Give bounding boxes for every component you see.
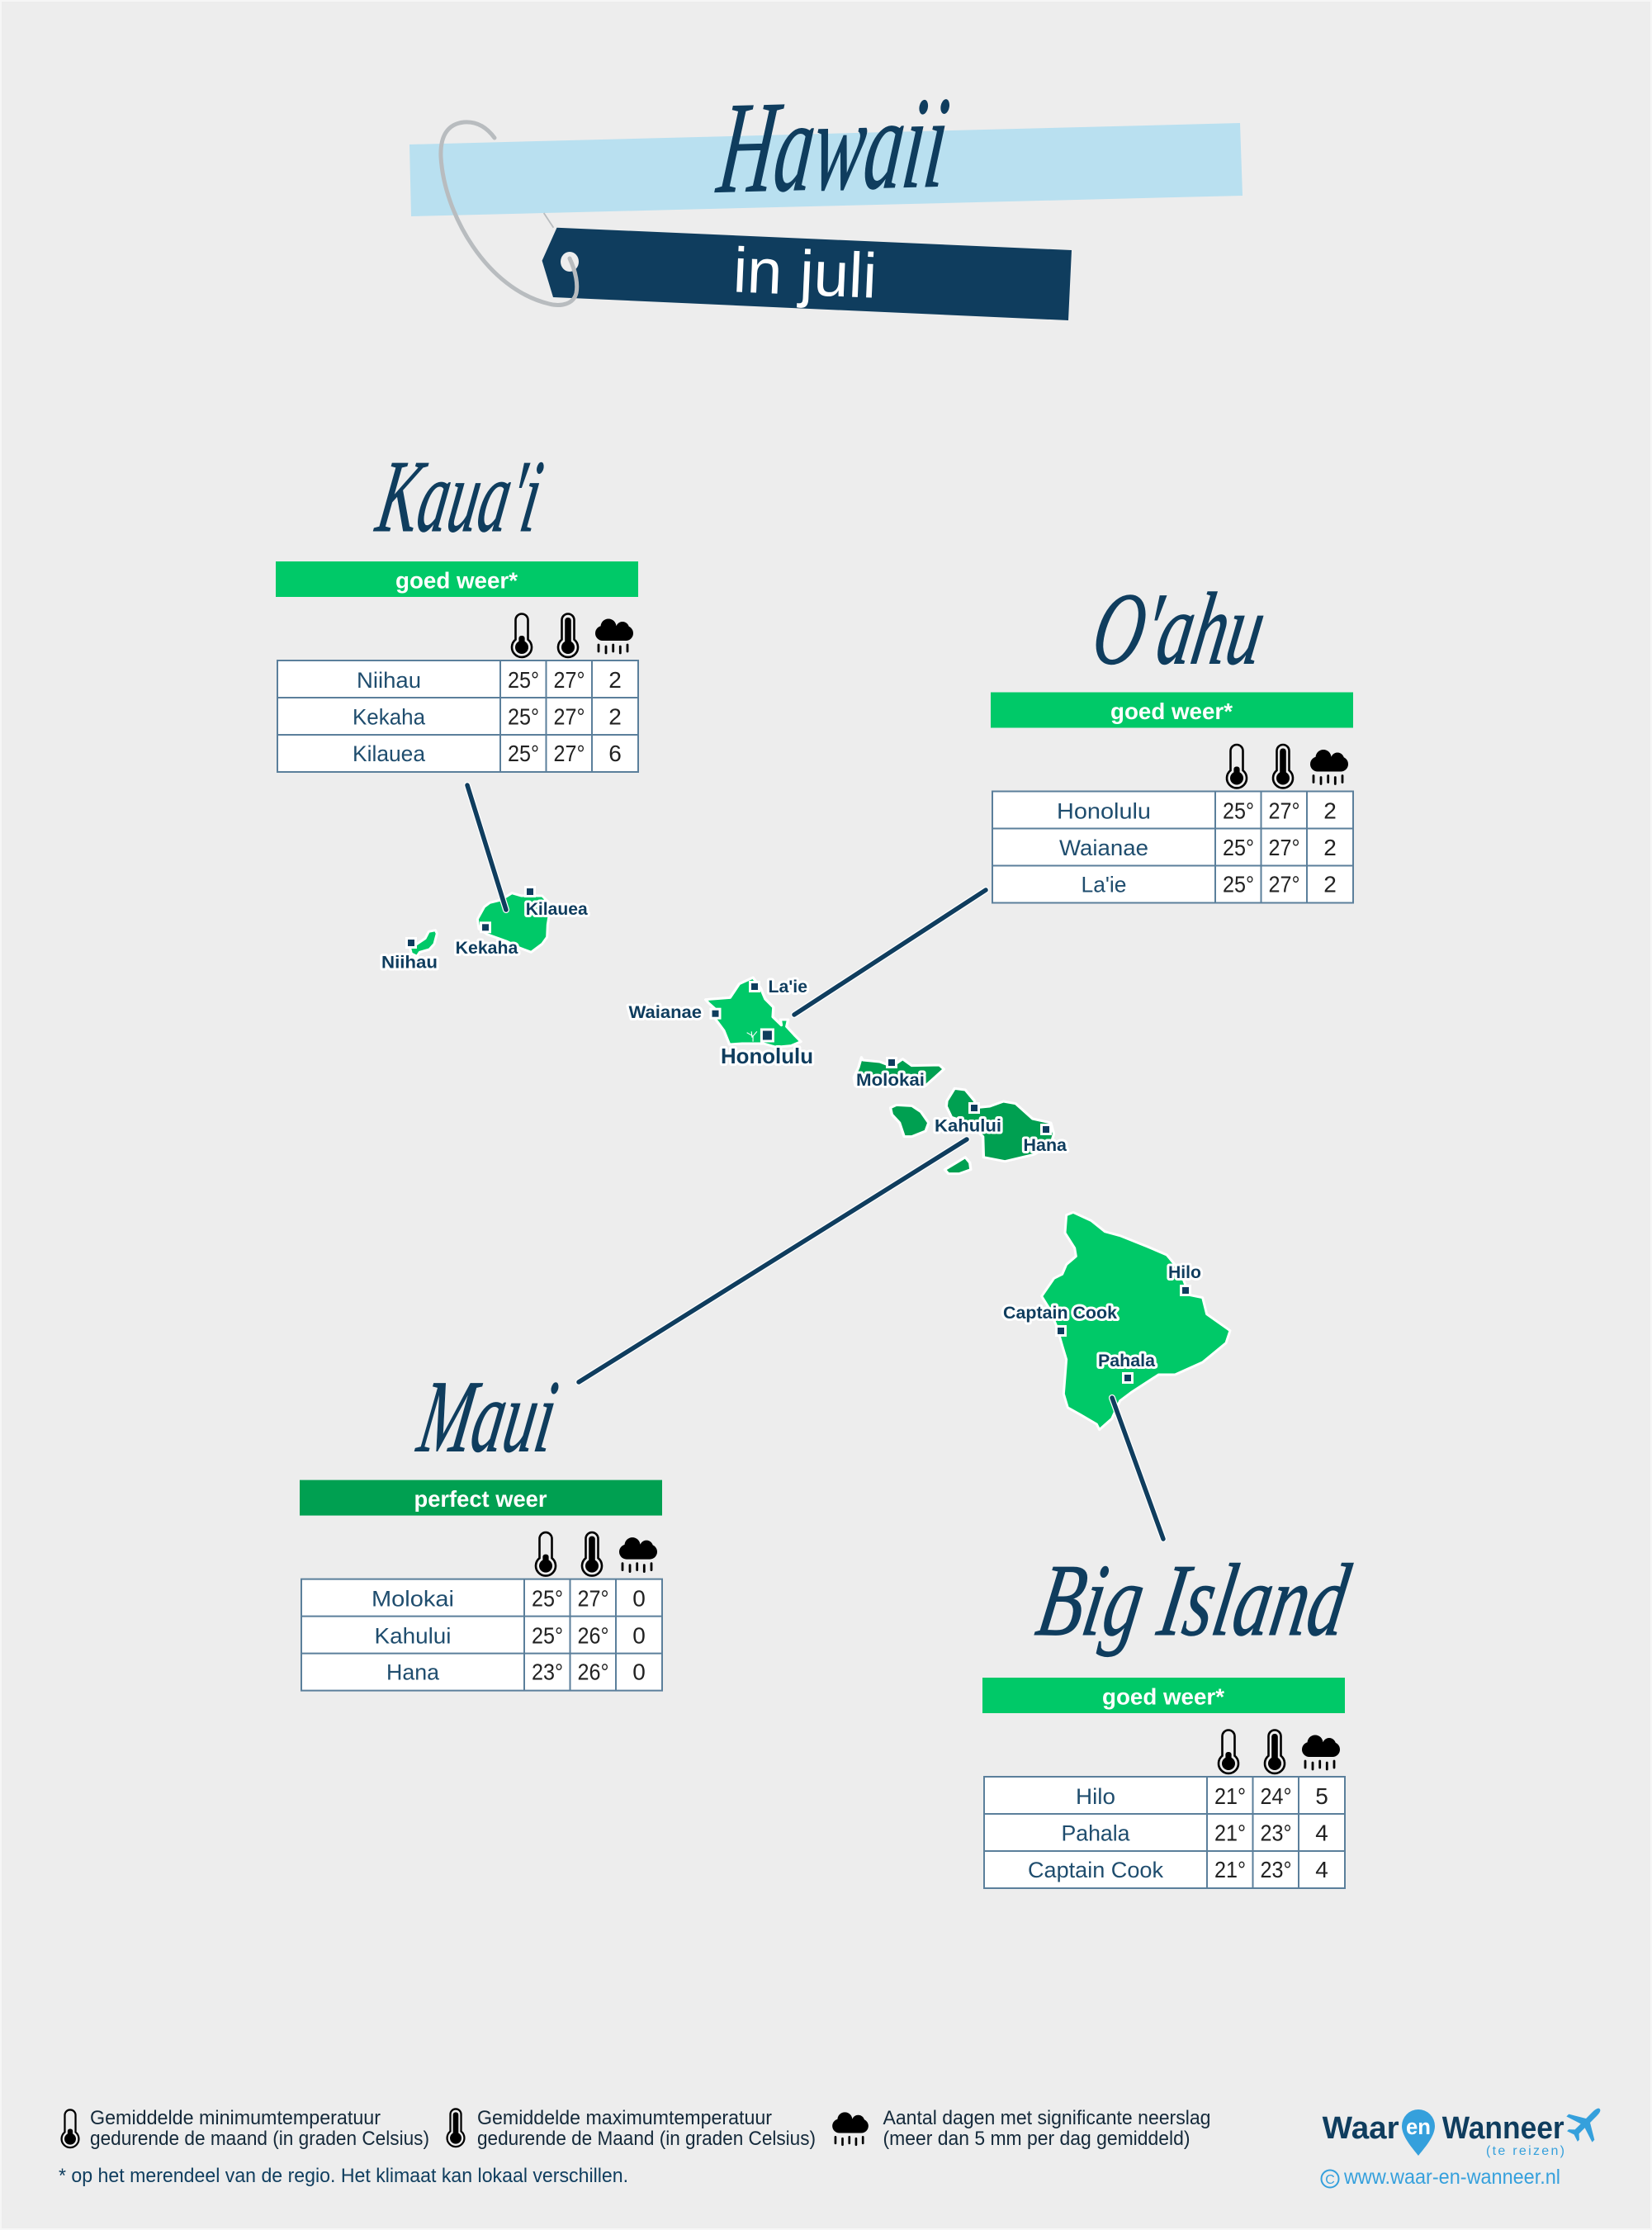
icon: rain	[595, 619, 633, 653]
legend: minimum temperature: Gemiddelde minimumtemperatuur	[90, 2107, 381, 2129]
weather table: 6	[608, 741, 622, 766]
place: Captain Cook	[1003, 1304, 1117, 1336]
island: Oahu	[706, 978, 801, 1047]
legend: rain days	[832, 2107, 1210, 2150]
weather table: 25°	[1223, 835, 1254, 860]
place: Pahala	[1098, 1352, 1155, 1382]
heading: Big Island: Big Island	[1030, 1544, 1357, 1658]
weather table: Pahala	[1062, 1821, 1130, 1846]
legend: maximum temperature: gedurende de Maand (in graden Celsius)	[477, 2128, 816, 2150]
icon: maximum temperature	[1273, 745, 1293, 788]
map markers and place names	[381, 887, 1201, 1382]
weather table	[984, 1777, 1345, 1888]
weather table: 27°	[553, 667, 585, 693]
weather rating bar: goed weer*	[395, 568, 518, 593]
weather table: 2	[1323, 798, 1337, 824]
place: Kekaha: Kekaha	[456, 939, 518, 958]
icon: maximum temperature	[558, 614, 578, 657]
place: Pahala: Pahala	[1098, 1352, 1155, 1371]
weather rating bar	[991, 692, 1353, 728]
subtitle: in juli: in juli	[731, 234, 878, 312]
weather table: Honolulu	[1057, 799, 1151, 824]
place: Honolulu	[721, 1030, 813, 1068]
weather table: Kahului	[375, 1623, 451, 1648]
place: Hilo	[1168, 1263, 1201, 1295]
tag ring	[441, 122, 577, 305]
island: Big Island	[1042, 1212, 1230, 1430]
weather table: Hilo	[1076, 1784, 1115, 1809]
weather table: 25°	[1223, 872, 1254, 897]
legend: minimum temperature: gedurende de maand (in graden Celsius)	[90, 2128, 429, 2150]
heading: O'ahu: O'ahu	[1085, 572, 1273, 686]
title: Hawaii: Hawaii	[711, 71, 955, 221]
copyright and website: www.waar-en-wanneer.nl	[1343, 2166, 1560, 2189]
place: Kekaha	[456, 923, 518, 958]
weather table: 25°	[508, 704, 539, 730]
weather table: 21°	[1214, 1857, 1246, 1882]
weather table: 25°	[508, 741, 539, 766]
heading: Maui: Maui	[410, 1360, 565, 1474]
connector: Kauai	[467, 785, 506, 910]
weather table: 2	[1323, 872, 1337, 897]
weather table: 24°	[1260, 1783, 1291, 1809]
place: La'ie	[750, 978, 807, 997]
icon: maximum temperature	[582, 1532, 602, 1576]
place: Captain Cook: Captain Cook	[1003, 1304, 1117, 1323]
weather table	[301, 1579, 662, 1691]
icon: minimum temperature	[1219, 1730, 1238, 1773]
place: Kahului	[935, 1103, 1001, 1136]
heading: Kaua'i: Kaua'i	[369, 440, 550, 554]
icon: rain	[1310, 750, 1348, 784]
island: Kahoolawe	[944, 1158, 971, 1174]
tag hole	[561, 252, 579, 272]
legend: maximum temperature: Gemiddelde maximumtemperatuur	[477, 2107, 772, 2129]
place: Molokai	[856, 1058, 925, 1090]
place: Kilauea: Kilauea	[526, 900, 588, 919]
place: Hana: Hana	[1024, 1136, 1067, 1155]
title band	[409, 123, 1243, 216]
icon: minimum temperature	[536, 1532, 556, 1576]
weather rating bar: perfect weer	[414, 1486, 547, 1512]
panel: Big Island	[982, 1544, 1357, 1888]
weather table: 21°	[1214, 1820, 1246, 1846]
weather table: 27°	[553, 741, 585, 766]
weather table: La'ie	[1082, 872, 1126, 897]
weather table: 21°	[1214, 1783, 1246, 1809]
weather table: Niihau	[357, 668, 421, 693]
connector: Big Island	[1112, 1398, 1163, 1539]
icon: rain	[1302, 1735, 1340, 1769]
weather table: 27°	[553, 704, 585, 730]
place: Kahului: Kahului	[935, 1117, 1001, 1136]
weather table: 27°	[1268, 872, 1299, 897]
weather table	[992, 791, 1353, 903]
weather table: Captain Cook	[1028, 1858, 1163, 1882]
weather table: 27°	[578, 1586, 609, 1612]
weather table: 25°	[532, 1622, 563, 1648]
weather rating bar: goed weer*	[1102, 1684, 1224, 1709]
weather table: 26°	[578, 1659, 609, 1685]
map: Hawaiian islands	[410, 893, 1230, 1430]
weather table: Kilauea	[353, 741, 426, 766]
legend: rain days: Aantal dagen met significante neerslag	[883, 2107, 1210, 2129]
island: Kauai	[477, 893, 550, 952]
island: Niihau	[410, 930, 437, 956]
icon: rain	[619, 1537, 657, 1572]
copyright and website: C	[1325, 2173, 1335, 2187]
weather table: 4	[1315, 1820, 1328, 1846]
weather table: 26°	[578, 1622, 609, 1648]
island: Maui	[946, 1088, 1053, 1162]
icon: maximum temperature	[1265, 1730, 1285, 1773]
connector: Oahu	[794, 890, 986, 1015]
place: Molokai: Molokai	[856, 1071, 925, 1090]
weather table: 0	[632, 1659, 646, 1685]
weather table	[277, 660, 638, 772]
weather rating bar	[982, 1678, 1345, 1713]
weather table: 5	[1315, 1783, 1328, 1809]
weather table: Kekaha	[353, 705, 426, 730]
weather table: 2	[608, 667, 622, 693]
weather table: 27°	[1268, 798, 1299, 824]
panel: Oahu	[991, 572, 1353, 903]
connector: Maui	[579, 1139, 967, 1382]
weather table: 23°	[532, 1659, 563, 1685]
weather table: 2	[608, 704, 622, 730]
icon: minimum temperature	[1227, 745, 1247, 788]
place: Honolulu: Honolulu	[721, 1044, 813, 1068]
panel: Kauai	[276, 440, 638, 772]
logo wordmark right: Wanneer	[1442, 2111, 1564, 2146]
place: Waianae: Waianae	[629, 1003, 702, 1022]
legend	[59, 2107, 1210, 2187]
footnote: * op het merendeel van de regio. Het klimaat kan lokaal verschillen.	[59, 2165, 628, 2187]
title block: Hawaii in juli	[409, 71, 1243, 320]
logo: Waar en Wanneer	[1321, 2096, 1612, 2189]
weather table: 0	[632, 1622, 646, 1648]
island: Lanai	[891, 1105, 929, 1137]
place: La'ie: La'ie	[768, 978, 807, 997]
place: Kilauea	[525, 887, 588, 919]
logo tagline: (te reizen)	[1486, 2144, 1564, 2158]
weather table: 25°	[1223, 798, 1254, 824]
luggage tag	[542, 228, 1072, 320]
weather table: 27°	[1268, 835, 1299, 860]
place: Hana	[1024, 1124, 1067, 1155]
weather rating bar	[276, 561, 638, 597]
weather table: Waianae	[1059, 836, 1148, 860]
weather table: Hana	[386, 1660, 440, 1685]
logo pin: en	[1406, 2114, 1431, 2139]
icon: airplane	[1560, 2096, 1612, 2149]
island: Molokai	[854, 1058, 944, 1086]
logo wordmark left: Waar	[1323, 2111, 1399, 2146]
weather rating bar	[300, 1480, 662, 1516]
weather rating bar: goed weer*	[1110, 698, 1233, 724]
tag string	[544, 213, 553, 228]
place: Niihau	[381, 938, 438, 973]
weather table: 25°	[532, 1586, 563, 1612]
weather table: 23°	[1260, 1820, 1291, 1846]
weather table: 25°	[508, 667, 539, 693]
legend: maximum temperature	[447, 2107, 816, 2150]
weather table: 4	[1315, 1857, 1328, 1882]
icon: minimum temperature	[512, 614, 532, 657]
logo pin	[1402, 2109, 1435, 2156]
weather table: 23°	[1260, 1857, 1291, 1882]
panel: Maui	[300, 1360, 662, 1691]
weather table: 2	[1323, 835, 1337, 860]
place: Niihau: Niihau	[381, 954, 438, 973]
legend: rain days: (meer dan 5 mm per dag gemiddeld)	[883, 2128, 1190, 2150]
weather table: Molokai	[372, 1587, 454, 1612]
weather table: 0	[632, 1586, 646, 1612]
place: Hilo: Hilo	[1168, 1263, 1201, 1282]
legend: minimum temperature	[62, 2107, 429, 2150]
